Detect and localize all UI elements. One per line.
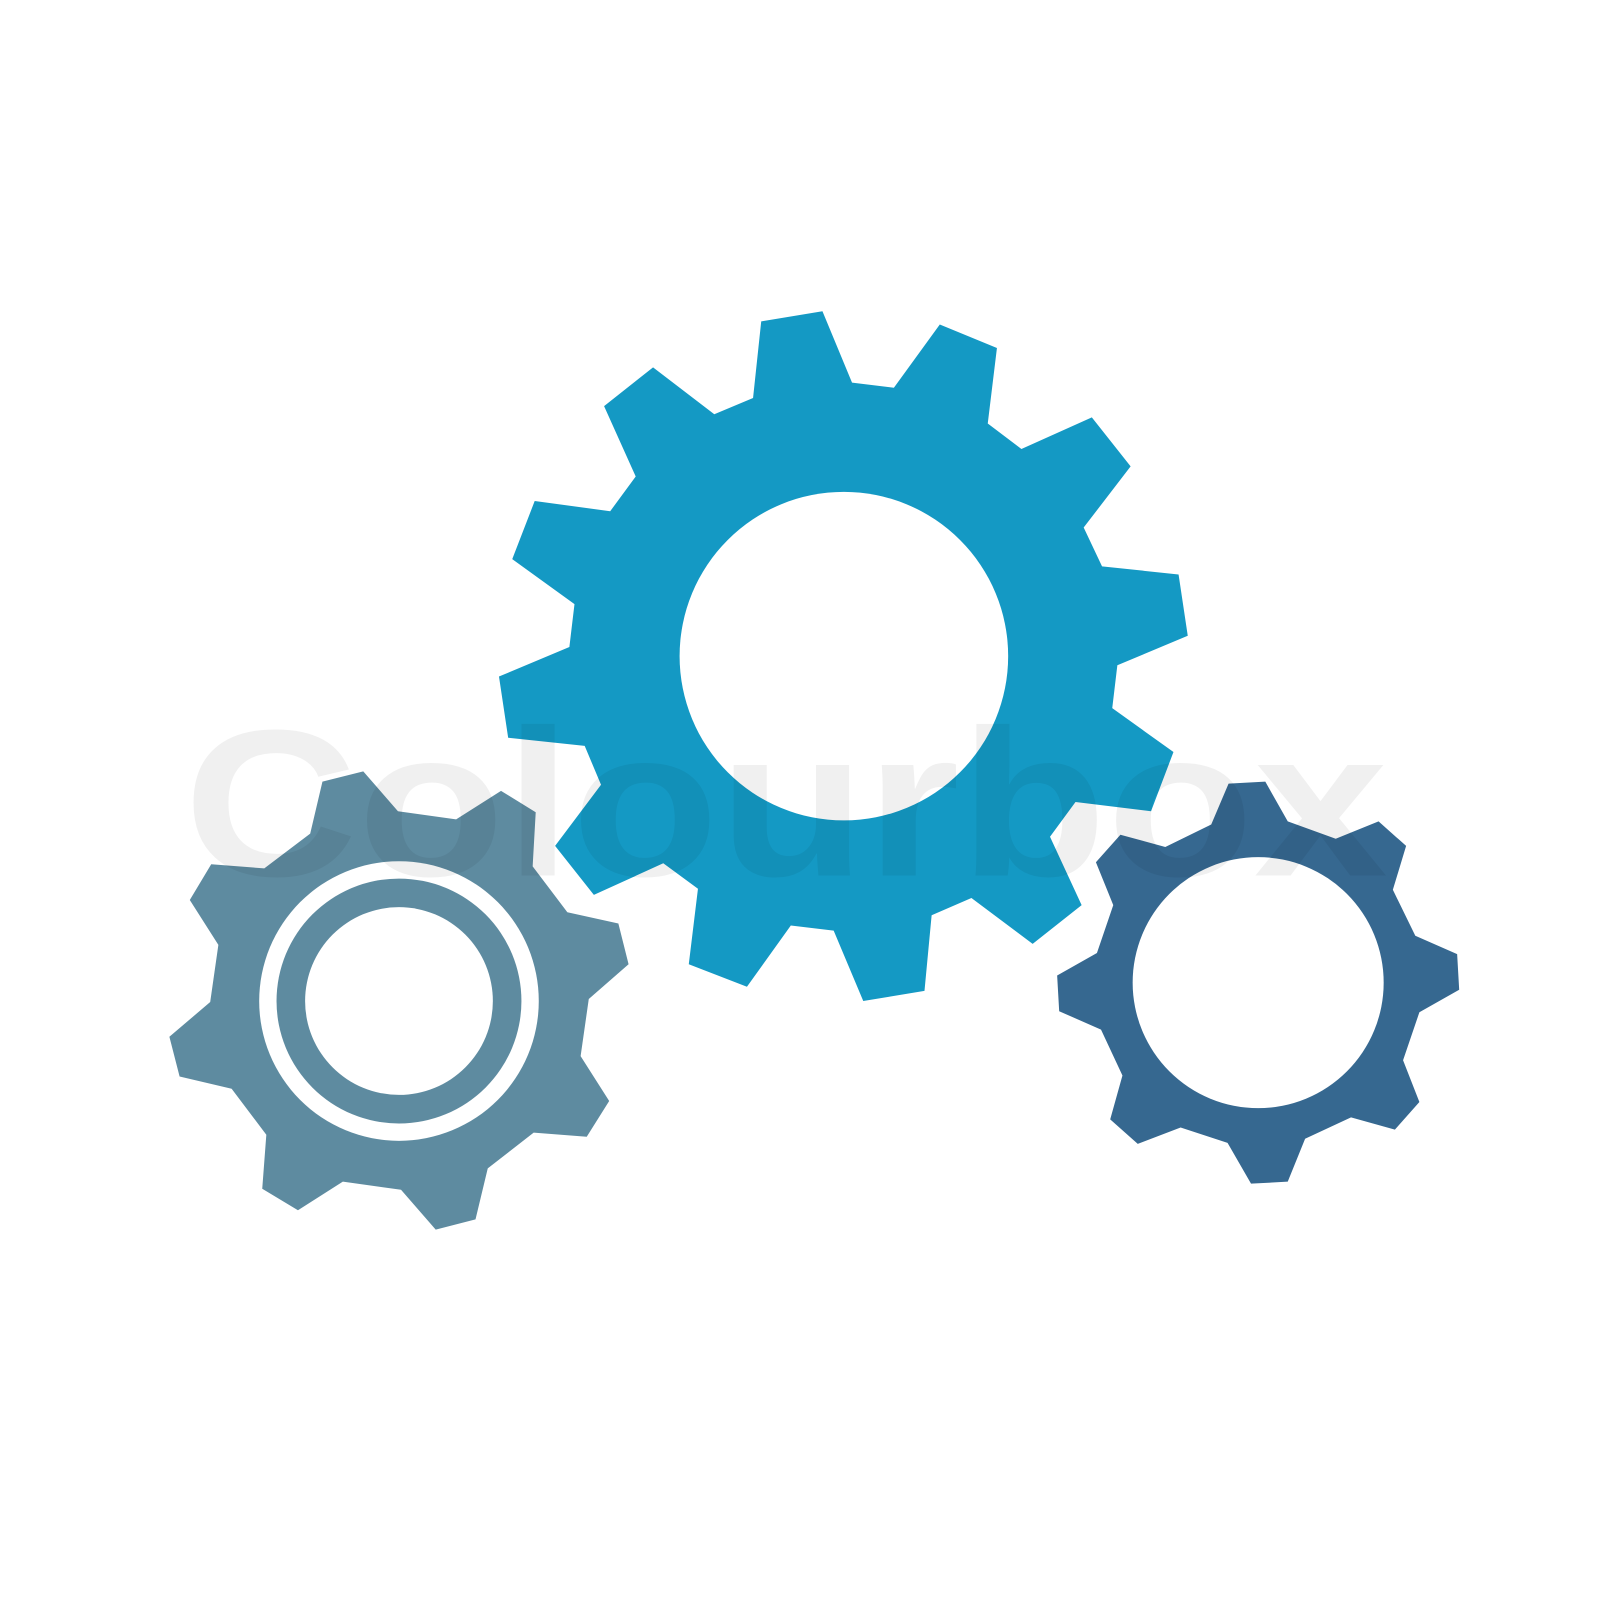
- gear: large blue: [499, 311, 1188, 1001]
- watermark text: Colourbox: [184, 688, 1388, 921]
- gear: right dark blue: [1057, 782, 1459, 1184]
- gear: left grey-blue: [169, 771, 629, 1230]
